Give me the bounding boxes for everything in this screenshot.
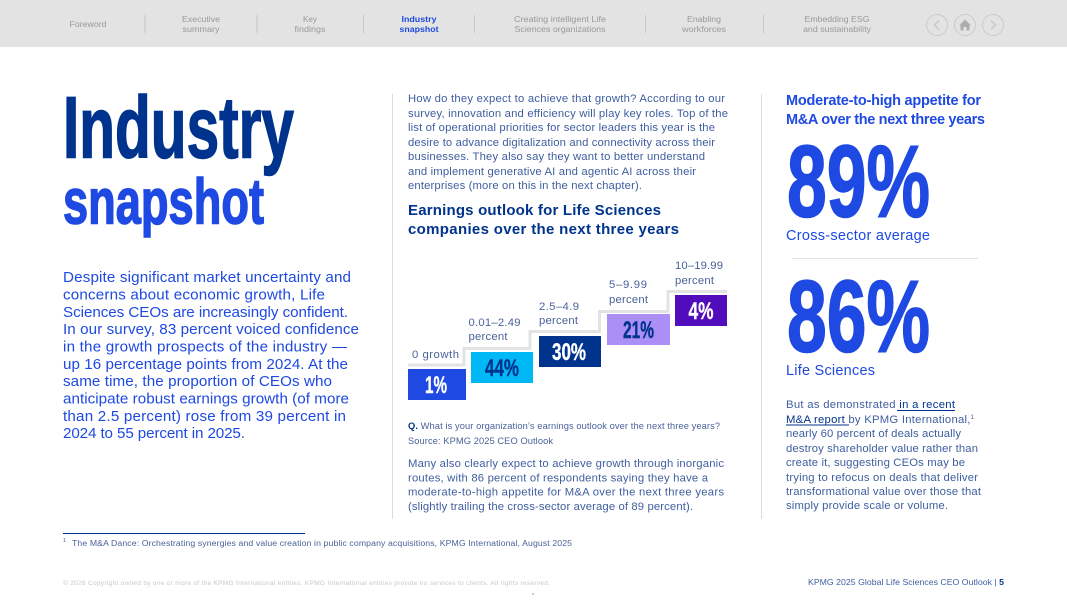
intro paragraph: concerns about economic growth, Life [63,286,325,304]
step: 5-9.99 percent: percent [609,294,649,306]
stat: cross-sector average [786,124,930,244]
title: Industry [63,80,294,176]
intro paragraph: 2024 to 55 percent in 2025. [63,425,245,442]
step: 5-9.99 percent [607,279,670,345]
navigation bar: snapshot [400,24,439,34]
navigation bar: Key [303,14,318,24]
step: 2.5-4.9 percent [539,301,601,367]
navigation bar: Enabling [687,14,721,24]
navigation bar [0,0,1067,47]
copyright: © 2026 Copyright owned by one or more of the KPMG International entities. KPMG International entities provide no services to clients. All rights reserved. [63,579,550,587]
icon: forward arrow [982,14,1004,36]
middle intro text [408,93,728,192]
middle closing text: routes, with 86 percent of respondents saying they have a [408,472,709,484]
right column paragraph: transformational value over those that [786,486,982,498]
navigation bar: Industry [402,14,437,24]
step: 2.5-4.9 percent: percent [539,315,579,327]
right column heading: M&A over the next three years [786,112,985,128]
question and source note [408,421,720,446]
navigation bar: summary [182,24,220,34]
right column paragraph [786,399,982,512]
step: 2.5-4.9 percent: 2.5–4.9 [539,301,579,313]
column divider right [761,94,762,519]
middle intro text: and implement generative AI and agentic AI across their [408,166,696,178]
middle intro text: businesses. They also say they want to better understand [408,151,705,163]
icon: home [954,14,976,36]
right column paragraph: trying to refocus on deals that deliver [786,472,978,484]
navigation bar: Foreword [70,19,107,29]
intro paragraph [63,269,359,442]
navigation bar: workforces [681,24,726,34]
step: 10-19.99 percent: 4% [688,298,714,325]
intro paragraph: anticipate robust earnings growth (of more [63,390,349,408]
step: 10-19.99 percent [675,260,727,326]
right column paragraph: simply provide scale or volume. [786,500,948,512]
middle closing text [408,458,724,513]
step: 5-9.99 percent: 21% [623,317,654,344]
right column paragraph: create it, suggesting CEOs may be [786,457,965,469]
navigation bar: Creating intelligent Life [514,14,606,24]
step: 0.01-2.49 percent: 0.01–2.49 [468,317,520,329]
stat: life sciences: Life Sciences [786,363,875,379]
stat: cross-sector average: 89% [787,124,930,238]
step: 5-9.99 percent: 5–9.99 [609,279,647,291]
step: 2.5-4.9 percent: 30% [552,339,586,366]
middle intro text: How do they expect to achieve that growth? According to our [408,93,725,105]
right column paragraph: M&A report by KPMG International, [786,414,970,426]
right column paragraph: nearly 60 percent of deals actually [786,428,961,440]
intro paragraph: Despite significant market uncertainty and [63,269,351,286]
middle intro text: enterprises (more on this in the next chapter). [408,180,642,192]
right column paragraph: destroy shareholder value rather than [786,443,978,455]
title [63,80,294,238]
footnote [63,533,572,548]
navigation bar: Embedding ESG [804,14,870,24]
step: 10-19.99 percent: 10–19.99 [675,260,723,272]
stat: life sciences [786,260,930,379]
page footer: KPMG 2025 Global Life Sciences CEO Outlook | 5 [808,577,1004,587]
step chart: earnings outlook [408,260,727,400]
chart heading [408,202,679,238]
intro paragraph: Sciences CEOs are increasingly confident. [63,304,348,321]
intro paragraph: same time, the proportion of CEOs who [63,373,332,390]
middle closing text: (slightly trailing the cross-sector average of 89 percent). [408,501,693,513]
navigation bar: Executive [182,14,220,24]
step: 0 growth [408,349,466,400]
right column heading [786,93,985,128]
middle intro text: desire to advance digitalization and connectivity across their [408,137,715,149]
icon: back arrow [926,14,948,36]
footnote: The M&A Dance: Orchestrating synergies and value creation in public company acquisitions, KPMG International, August 2025 [72,538,572,548]
footnote: 1 [63,538,66,544]
column divider left [392,94,393,519]
stat: life sciences: 86% [787,260,930,374]
step: 0.01-2.49 percent [468,317,533,383]
question and source note: Q. What is your organization’s earnings outlook over the next three years? [408,421,720,431]
step: 0 growth: 1% [425,372,447,399]
middle intro text: survey, innovation and efficiency will play key roles. Top of the [408,108,728,120]
step: 0.01-2.49 percent: percent [468,331,508,343]
chart heading: companies over the next three years [408,221,679,238]
question and source note: Source: KPMG 2025 CEO Outlook [408,436,553,446]
step: 0 growth: 0 growth [412,349,459,361]
intro paragraph: up 16 percentage points from 2024. At the [63,356,348,373]
navigation bar: findings [294,24,326,34]
step: 0.01-2.49 percent: 44% [485,355,519,382]
navigation bar: Sciences organizations [514,24,606,34]
right column paragraph: But as demonstrated in a recent [786,399,956,411]
middle intro text: list of operational priorities for sector leaders this year is the [408,122,715,134]
middle closing text: Many also clearly expect to achieve growth through inorganic [408,458,724,470]
right column paragraph: 1 [971,415,975,421]
navigation bar: and sustainability [803,24,872,34]
chart heading: Earnings outlook for Life Sciences [408,202,661,219]
intro paragraph: than 2.5 percent) rose from 39 percent in [63,408,346,425]
intro paragraph: In our survey, 83 percent voiced confidence [63,321,359,338]
title: snapshot [63,166,264,238]
intro paragraph: in the growth prospects of the industry — [63,338,348,356]
middle closing text: moderate-to-high appetite for M&A over the next three years [408,486,724,498]
stat: cross-sector average: Cross-sector average [786,228,930,244]
step: 10-19.99 percent: percent [675,275,715,287]
right column heading: Moderate-to-high appetite for [786,93,981,109]
